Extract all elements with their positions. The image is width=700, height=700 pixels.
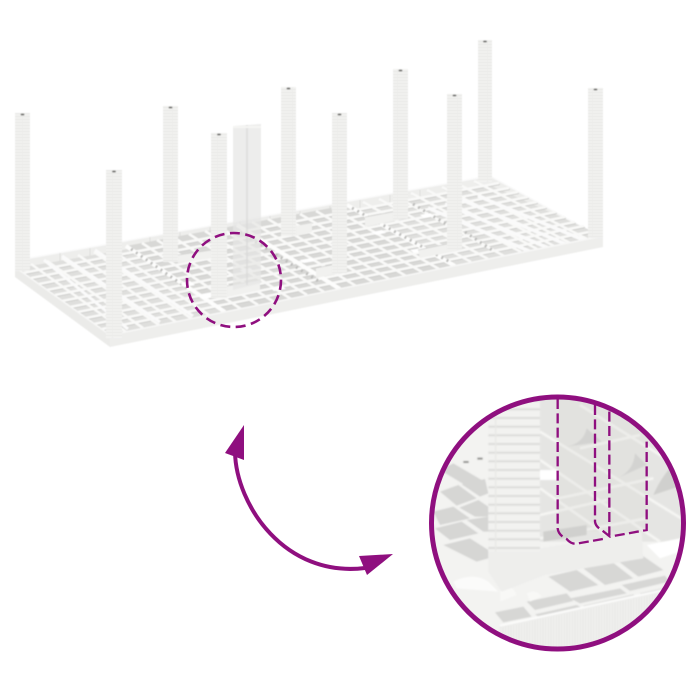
post 9 (478, 40, 492, 182)
platform with posts (15, 40, 603, 347)
dashed ghost post outline (558, 399, 647, 544)
ghost region cells (540, 395, 687, 558)
long ribs in right panel (428, 196, 586, 254)
post 6 (332, 113, 347, 273)
translucent ghost post pair (233, 124, 261, 290)
front rim face (588, 592, 660, 608)
outer rim and front faces (15, 236, 603, 347)
long ribs in left panel (44, 250, 193, 329)
panel dividers (126, 205, 455, 312)
dashed detail circle (187, 233, 281, 327)
curved double-headed arrow (225, 425, 393, 575)
lens ring (431, 397, 683, 649)
post column (488, 398, 540, 552)
back rim wall (28, 177, 588, 270)
fin rows along panel dividers (131, 204, 492, 290)
post 8 (447, 94, 462, 250)
left grid cells (433, 458, 498, 592)
arrowhead right (359, 554, 393, 575)
lower grid cells (495, 555, 680, 622)
bright highlights (180, 213, 434, 299)
post foot bar (504, 533, 644, 590)
arrowhead up (225, 425, 244, 460)
grid floor (15, 181, 603, 335)
post 2 (106, 170, 122, 338)
post foot bars (178, 209, 462, 297)
post 1 (15, 113, 30, 271)
darker centre panels (126, 205, 455, 312)
post 10 (588, 88, 603, 238)
magnified detail lens (429, 394, 686, 652)
post 5 (281, 87, 296, 236)
post 3 (163, 106, 178, 262)
lens contents (434, 400, 681, 646)
post 7 (393, 69, 408, 219)
post 4 (211, 133, 227, 298)
